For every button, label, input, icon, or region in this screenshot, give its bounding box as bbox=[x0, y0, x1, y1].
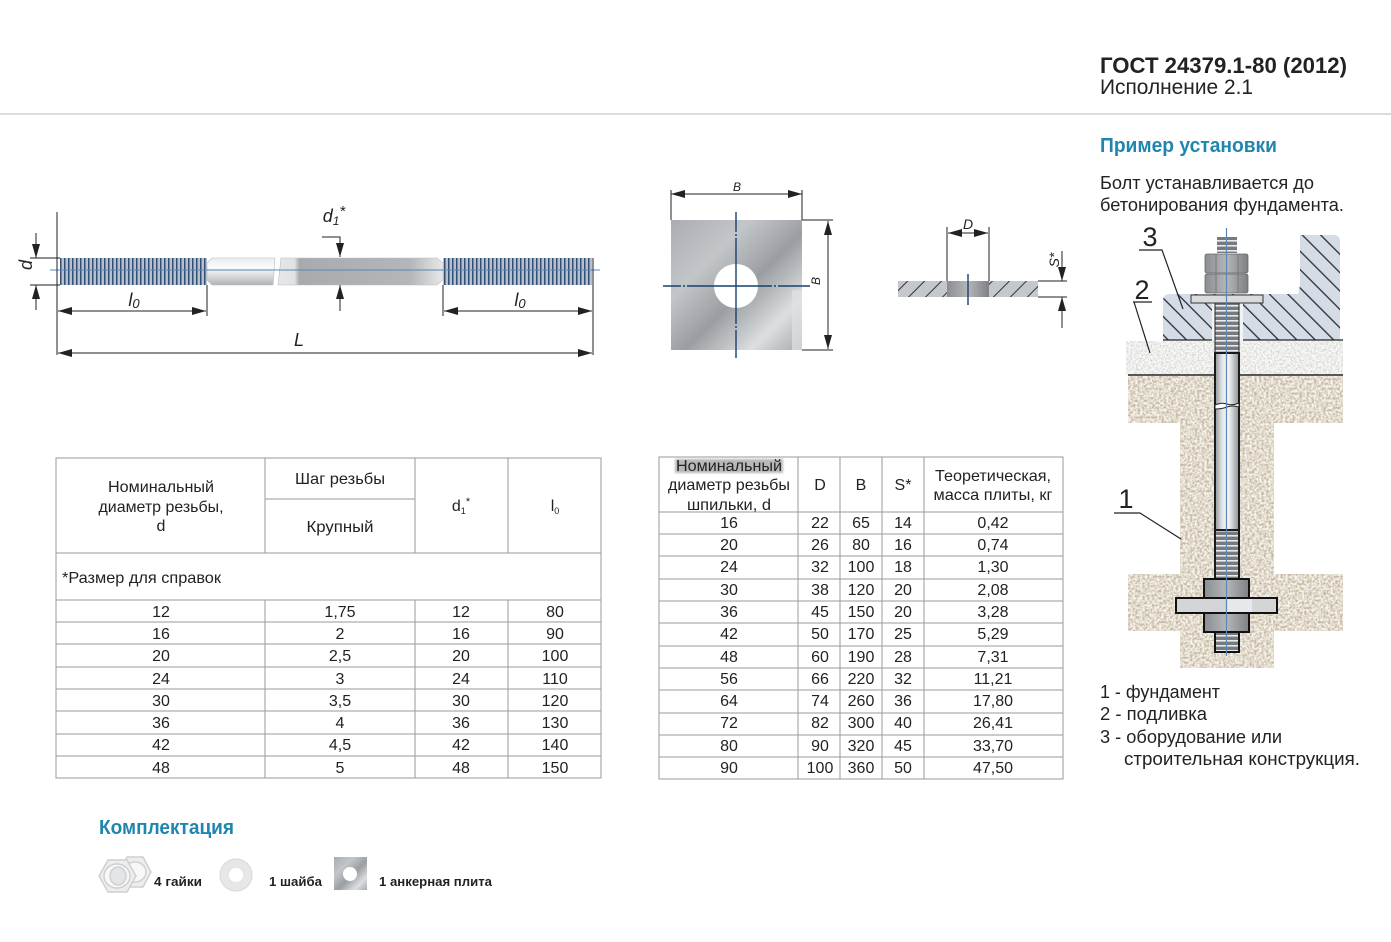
title: Исполнение 2.1 bbox=[1100, 76, 1253, 99]
table: plate dimensions bbox=[659, 457, 1063, 779]
stud: right thread bbox=[443, 258, 592, 285]
table rows: 100 bbox=[807, 760, 833, 777]
drawing: square plate bbox=[663, 180, 833, 358]
table rows: 24 bbox=[152, 671, 170, 688]
table rows: 170 bbox=[848, 626, 874, 643]
table rows: 32 bbox=[894, 671, 912, 688]
table rows: 110 bbox=[542, 671, 568, 688]
axis bbox=[1226, 228, 1228, 656]
bottom thread bbox=[1215, 632, 1239, 652]
table: thread dimensions bbox=[56, 458, 601, 778]
heading: package contents: Комплектация bbox=[99, 817, 234, 839]
stud: smooth shank left bbox=[207, 258, 275, 285]
table rows: 42 bbox=[720, 626, 738, 643]
table rows: 5 bbox=[336, 760, 345, 777]
table rows: 7,31 bbox=[977, 649, 1009, 666]
section hole bbox=[947, 281, 989, 297]
table rows: 30 bbox=[152, 693, 170, 710]
table rows: 90 bbox=[811, 738, 829, 755]
table rows: 3 bbox=[336, 671, 345, 688]
table grid bbox=[56, 458, 601, 778]
table rows: 20 bbox=[894, 604, 912, 621]
table rows: 50 bbox=[894, 760, 912, 777]
table rows: 65 bbox=[852, 515, 870, 532]
dimension lines bbox=[30, 212, 593, 355]
table rows: 48 bbox=[152, 760, 170, 777]
stud: smooth shank right bbox=[278, 258, 443, 285]
table rows: 36 bbox=[720, 604, 738, 621]
dimension labels: d bbox=[16, 259, 36, 270]
dimension labels: 0 bbox=[518, 296, 526, 311]
table header: шпильки, d bbox=[687, 497, 771, 514]
table rows: 36 bbox=[152, 715, 170, 732]
table header: 0 bbox=[554, 506, 559, 516]
table rows: 40 bbox=[894, 715, 912, 732]
table rows: 16 bbox=[152, 626, 170, 643]
label: washer: 1 шайба bbox=[269, 874, 323, 889]
table rows: 80 bbox=[852, 537, 870, 554]
icon: washer bbox=[220, 859, 252, 891]
table rows: 66 bbox=[811, 671, 829, 688]
table rows: 36 bbox=[452, 715, 470, 732]
title: ГОСТ 24379.1-80 (2012) bbox=[1100, 53, 1347, 78]
plate axes bbox=[663, 212, 810, 358]
drawing: square plate: B bbox=[809, 277, 823, 285]
table rows: 25 bbox=[894, 626, 912, 643]
table rows: 36 bbox=[894, 693, 912, 710]
callout 3: 3 bbox=[1142, 222, 1158, 252]
text: installation note bbox=[1100, 173, 1344, 215]
heading: installation example: Пример установки bbox=[1100, 135, 1277, 157]
drawing: plate section: S* bbox=[1046, 252, 1062, 267]
table rows: 20 bbox=[152, 648, 170, 665]
table rows: 0,42 bbox=[977, 515, 1009, 532]
table rows: 22 bbox=[811, 515, 829, 532]
table rows: 260 bbox=[848, 693, 874, 710]
plate labels: B bbox=[733, 180, 741, 194]
table header: Крупный bbox=[306, 519, 374, 536]
callout 1: 1 bbox=[1118, 484, 1134, 514]
table header: S* bbox=[895, 477, 911, 494]
table rows: 100 bbox=[848, 559, 874, 576]
grout layer bbox=[1126, 341, 1343, 375]
drawing: installation section bbox=[1114, 222, 1343, 668]
table rows: 16 bbox=[720, 515, 738, 532]
dimension labels: d bbox=[323, 206, 333, 226]
anchor hole bbox=[1212, 303, 1243, 341]
table header: 1 bbox=[461, 506, 466, 516]
table rows: 150 bbox=[542, 760, 568, 777]
label: nuts: 4 гайки bbox=[154, 874, 202, 889]
table rows: 190 bbox=[848, 649, 874, 666]
icon: nuts bbox=[99, 857, 151, 892]
table rows: 14 bbox=[894, 515, 912, 532]
table header: l bbox=[551, 498, 554, 515]
legend: 3 - оборудование или bbox=[1100, 727, 1282, 747]
dimension labels: 0 bbox=[132, 296, 140, 311]
table header: масса плиты, кг bbox=[934, 487, 1053, 504]
table rows: 42 bbox=[152, 737, 170, 754]
legend: строительная конструкция. bbox=[1124, 749, 1360, 769]
table rows: 20 bbox=[894, 582, 912, 599]
table header bbox=[62, 471, 559, 587]
dimension labels: L bbox=[294, 330, 304, 350]
drawing: anchor stud bbox=[16, 203, 600, 355]
table rows: 2,08 bbox=[977, 582, 1009, 599]
table rows: 32 bbox=[811, 559, 829, 576]
table rows: 80 bbox=[720, 738, 738, 755]
table rows: 24 bbox=[452, 671, 470, 688]
table header: Теоретическая, bbox=[935, 468, 1051, 485]
dimension labels: l bbox=[514, 290, 518, 310]
table rows bbox=[152, 604, 568, 777]
table header: диаметр резьбы bbox=[668, 477, 790, 494]
table rows: 33,70 bbox=[973, 738, 1013, 755]
stud thread lower bbox=[1215, 530, 1239, 580]
table rows: 300 bbox=[848, 715, 874, 732]
top thread bbox=[1217, 237, 1237, 253]
equipment base bbox=[1163, 235, 1340, 340]
table rows: 320 bbox=[848, 738, 874, 755]
table rows: 26 bbox=[811, 537, 829, 554]
table header: d bbox=[157, 518, 165, 535]
table rows: 120 bbox=[848, 582, 874, 599]
table rows: 2 bbox=[336, 626, 345, 643]
table header: D bbox=[814, 477, 826, 494]
table rows: 1,30 bbox=[977, 559, 1009, 576]
table rows: 2,5 bbox=[329, 648, 351, 665]
text: installation note: Болт устанавливается до bbox=[1100, 173, 1314, 193]
table rows: 17,80 bbox=[973, 693, 1013, 710]
plate dimensions bbox=[671, 190, 833, 350]
table rows: 1,75 bbox=[324, 604, 356, 621]
section dimensions bbox=[947, 227, 1067, 328]
table rows: 220 bbox=[848, 671, 874, 688]
table rows: 3,28 bbox=[977, 604, 1009, 621]
text: installation note: бетонирования фундамента. bbox=[1100, 195, 1344, 215]
table rows: 42 bbox=[452, 737, 470, 754]
table rows: 18 bbox=[894, 559, 912, 576]
table header: B bbox=[856, 477, 866, 494]
top nuts bbox=[1205, 254, 1248, 293]
foundation concrete bbox=[1128, 376, 1343, 668]
table header: Шаг резьбы bbox=[295, 471, 385, 488]
top washer bbox=[1191, 295, 1263, 303]
lower nut and plate bbox=[1176, 579, 1277, 632]
table rows: 48 bbox=[720, 649, 738, 666]
table header: Номинальный bbox=[108, 479, 214, 496]
table rows: 130 bbox=[542, 715, 568, 732]
table rows: 150 bbox=[848, 604, 874, 621]
callout 3 bbox=[1139, 222, 1183, 309]
callout 2: 2 bbox=[1134, 275, 1150, 305]
dimension labels bbox=[16, 203, 526, 350]
table rows: 90 bbox=[546, 626, 564, 643]
stud: left thread bbox=[60, 258, 207, 285]
table rows: 140 bbox=[542, 737, 568, 754]
callout 2 bbox=[1133, 275, 1152, 353]
table rows: 120 bbox=[542, 693, 568, 710]
table rows: 0,74 bbox=[977, 537, 1009, 554]
table rows: 64 bbox=[720, 693, 738, 710]
dimension labels: 1 bbox=[333, 214, 339, 228]
table rows: 12 bbox=[452, 604, 470, 621]
icon: plate bbox=[334, 857, 367, 890]
legend: 2 - подливка bbox=[1100, 704, 1208, 724]
header rule bbox=[0, 113, 1391, 115]
table rows: 4,5 bbox=[329, 737, 351, 754]
legend: 1 - фундамент bbox=[1100, 682, 1220, 702]
table rows: 20 bbox=[720, 537, 738, 554]
table rows: 28 bbox=[894, 649, 912, 666]
table grid bbox=[659, 457, 1063, 779]
table rows: 26,41 bbox=[973, 715, 1013, 732]
table rows: 3,5 bbox=[329, 693, 351, 710]
table header bbox=[668, 458, 1053, 514]
table rows bbox=[720, 515, 1013, 777]
table rows: 82 bbox=[811, 715, 829, 732]
table rows: 5,29 bbox=[977, 626, 1009, 643]
table rows: 24 bbox=[720, 559, 738, 576]
table rows: 45 bbox=[894, 738, 912, 755]
title bbox=[1100, 53, 1347, 99]
table rows: 4 bbox=[336, 715, 345, 732]
table rows: 16 bbox=[452, 626, 470, 643]
table rows: 50 bbox=[811, 626, 829, 643]
table rows: 60 bbox=[811, 649, 829, 666]
table rows: 30 bbox=[720, 582, 738, 599]
table rows: 45 bbox=[811, 604, 829, 621]
drawing: plate section bbox=[898, 216, 1067, 328]
legend bbox=[1100, 682, 1360, 769]
table rows: 47,50 bbox=[973, 760, 1013, 777]
dimension labels: l bbox=[128, 290, 132, 310]
section hatched bbox=[898, 281, 947, 297]
label: plate: 1 анкерная плита bbox=[379, 874, 493, 889]
table rows: 38 bbox=[811, 582, 829, 599]
table rows: 100 bbox=[542, 648, 568, 665]
stud shank bbox=[1215, 353, 1239, 530]
table header: диаметр резьбы, bbox=[98, 499, 224, 516]
package contents items bbox=[99, 857, 493, 892]
table rows: 48 bbox=[452, 760, 470, 777]
table rows: 72 bbox=[720, 715, 738, 732]
table header: * bbox=[466, 496, 471, 508]
stud thread upper bbox=[1215, 303, 1239, 353]
table rows: 90 bbox=[720, 760, 738, 777]
table header: d bbox=[452, 498, 461, 515]
table rows: 74 bbox=[811, 693, 829, 710]
dimension labels: * bbox=[339, 203, 346, 220]
callout 1 bbox=[1114, 484, 1181, 539]
table rows: 80 bbox=[546, 604, 564, 621]
section labels: D bbox=[963, 216, 973, 232]
table rows: 30 bbox=[452, 693, 470, 710]
plate face bbox=[671, 220, 802, 350]
table rows: 56 bbox=[720, 671, 738, 688]
table header: *Размер для справок bbox=[62, 570, 222, 587]
table rows: 16 bbox=[894, 537, 912, 554]
table header: Номинальный bbox=[676, 458, 782, 475]
table rows: 11,21 bbox=[974, 671, 1013, 688]
table rows: 12 bbox=[152, 604, 170, 621]
table rows: 360 bbox=[848, 760, 874, 777]
table rows: 20 bbox=[452, 648, 470, 665]
